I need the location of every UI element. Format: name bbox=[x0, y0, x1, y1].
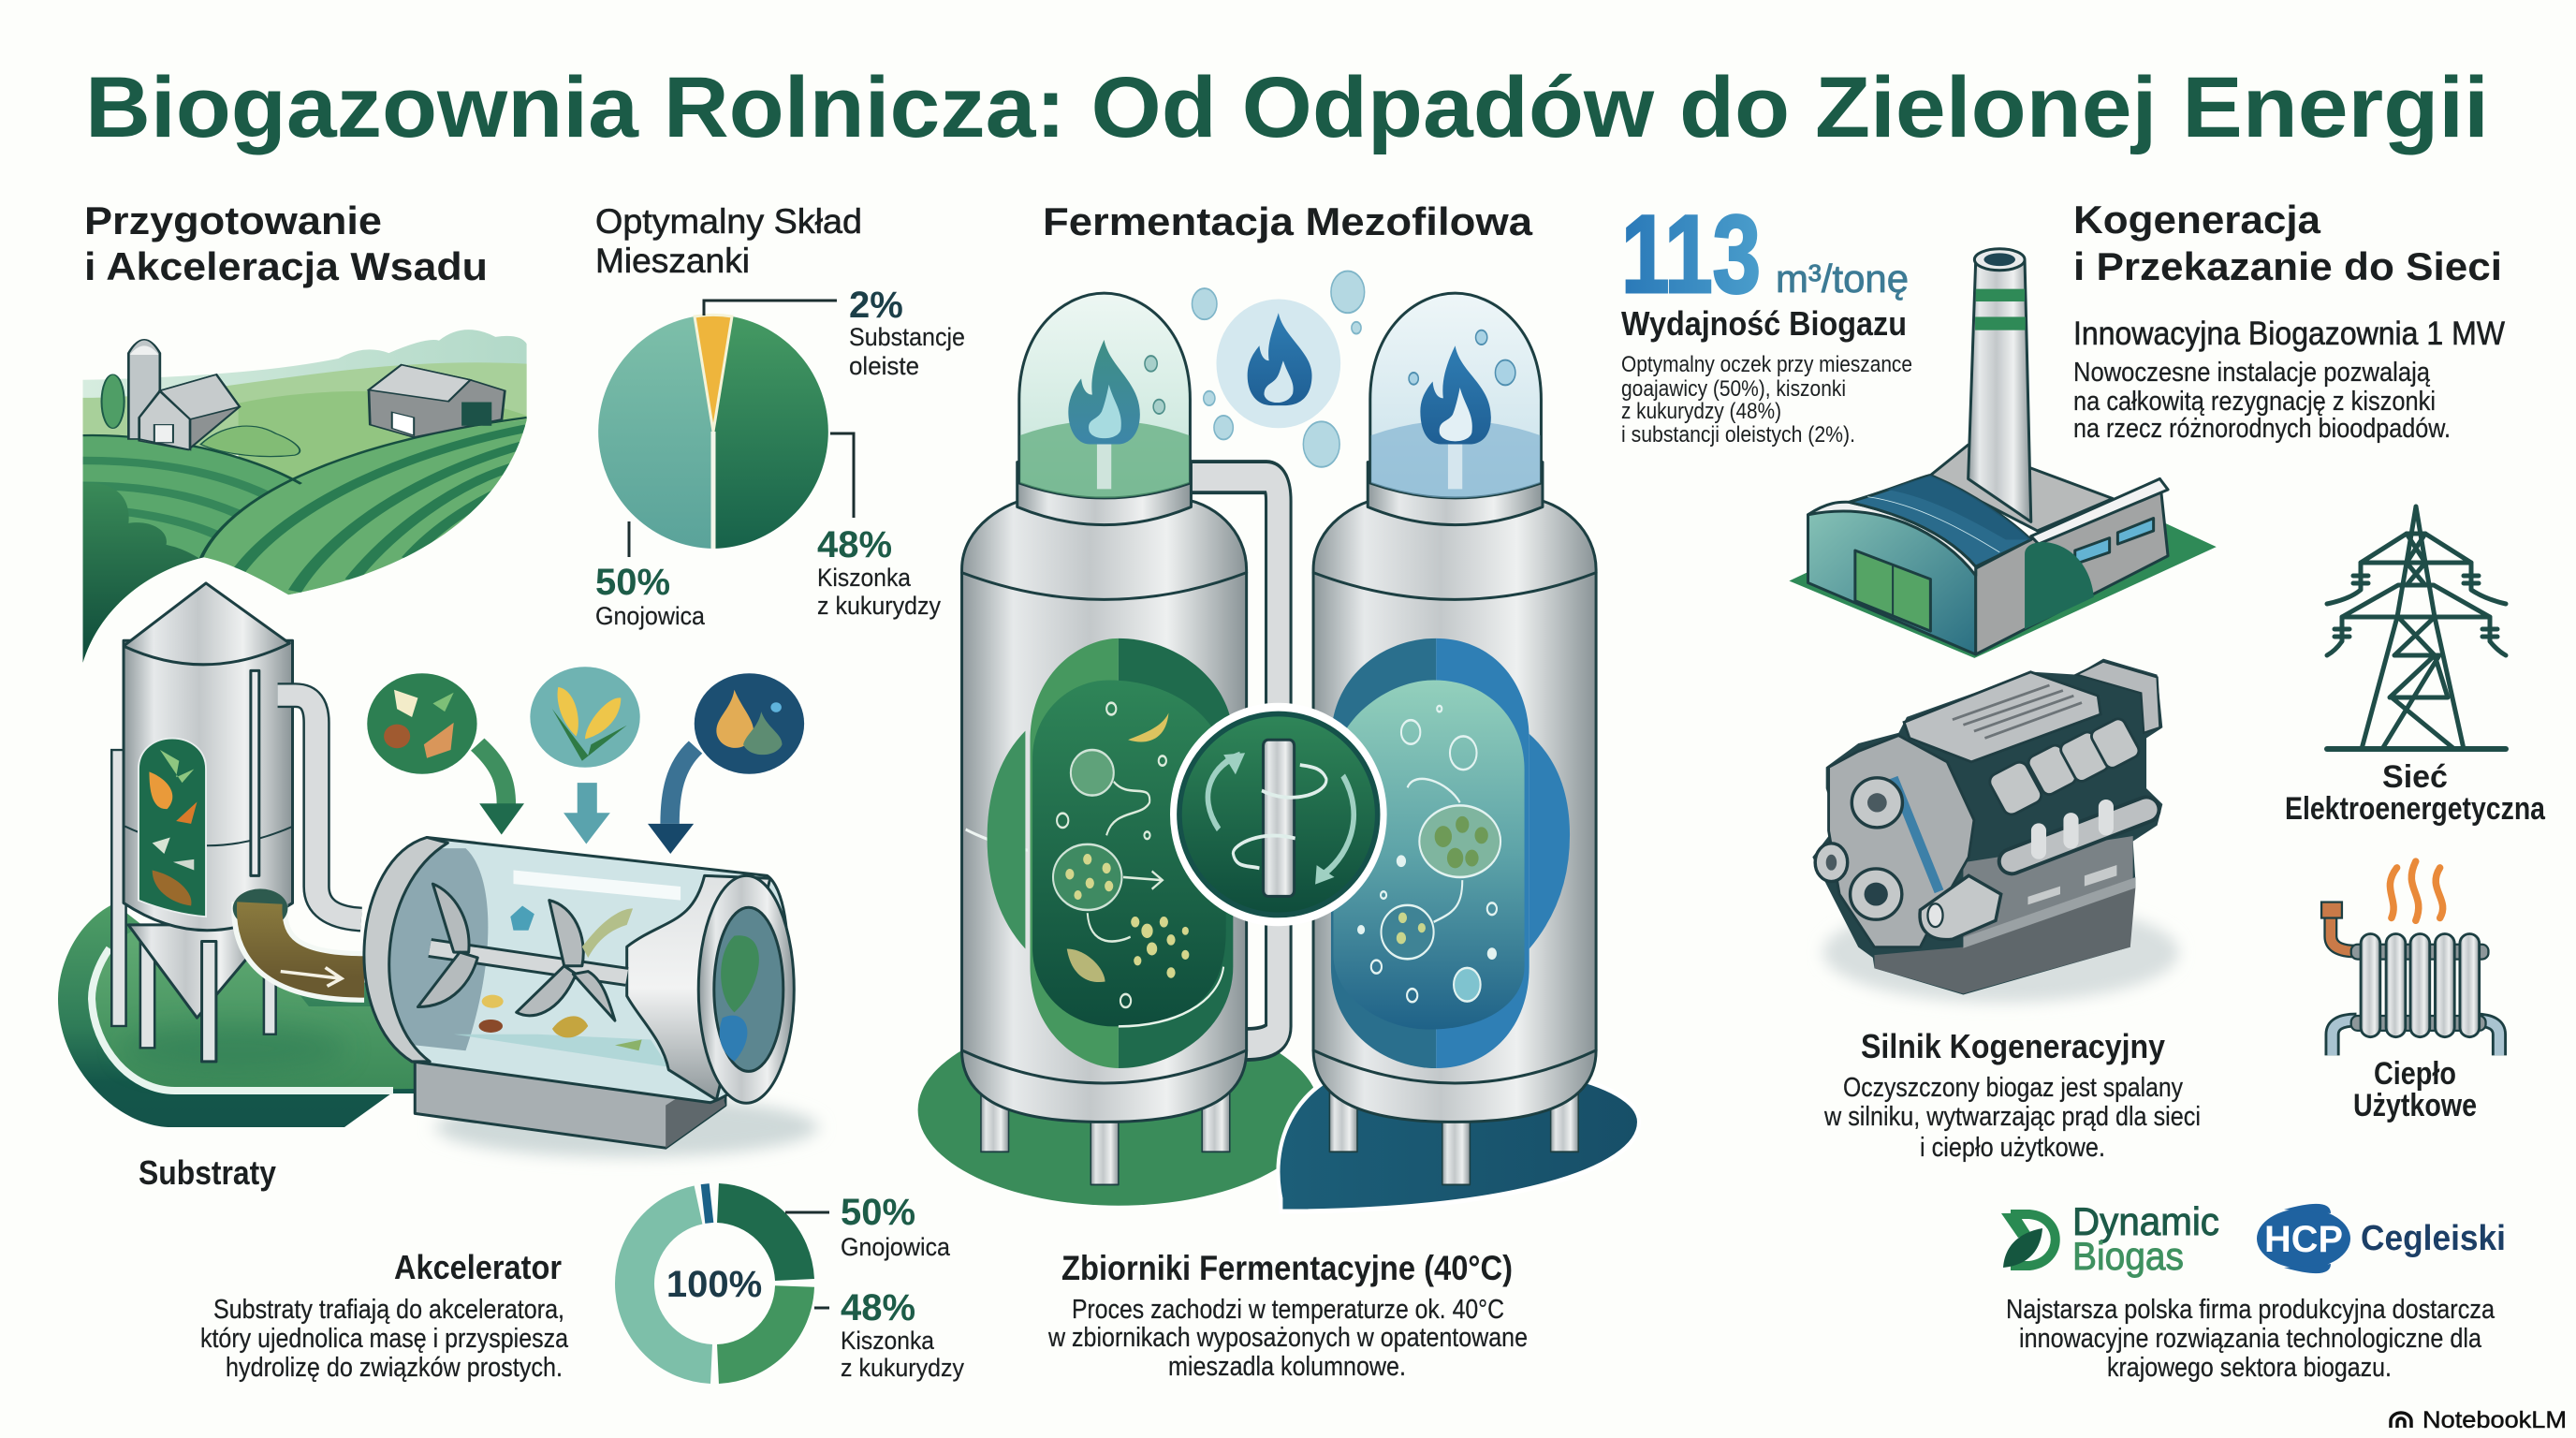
accelerator description: który ujednolica masę i przyspiesza bbox=[200, 1324, 569, 1354]
logo: Dynamic Biogas: Biogas bbox=[2072, 1234, 2184, 1278]
fermentation description: mieszadla kolumnowe. bbox=[1168, 1352, 1406, 1382]
heading: mix composition: Mieszanki bbox=[595, 242, 750, 280]
microbes in green tank bbox=[1053, 703, 1189, 1007]
second barn bbox=[369, 365, 505, 437]
input circle: corn bbox=[530, 667, 640, 768]
input circle: biowaste bbox=[367, 673, 477, 774]
company description bbox=[2006, 1295, 2496, 1383]
accelerator description bbox=[200, 1248, 569, 1383]
connecting pipe bbox=[1190, 477, 1279, 1045]
title: Biogazownia Rolnicza: Od Odpadów do Zielonej Energii bbox=[85, 60, 2489, 155]
accelerator base bbox=[415, 1062, 725, 1148]
pie labels: z kukurydzy bbox=[817, 592, 941, 620]
logo: Dynamic Biogas bbox=[2001, 1199, 2219, 1278]
pie labels: 50% bbox=[595, 562, 670, 603]
innovation text bbox=[2073, 315, 2505, 444]
pie chart bbox=[598, 301, 854, 557]
heading: preparation: i Akceleracja Wsadu bbox=[84, 244, 488, 288]
ground shapes bbox=[918, 1015, 1639, 1211]
engine description: Silnik Kogeneracyjny bbox=[1861, 1027, 2165, 1065]
right tank bbox=[1313, 498, 1596, 1122]
pylon label: Sieć bbox=[2382, 759, 2448, 795]
pie labels bbox=[595, 285, 965, 630]
arrow: biowaste to drum bbox=[477, 744, 524, 835]
mixer badge bbox=[1174, 707, 1383, 922]
radiator label bbox=[2353, 1056, 2477, 1123]
logo: HCP Cegielski: Cegleiski bbox=[2361, 1219, 2506, 1258]
logo: HCP Cegielski bbox=[2257, 1204, 2506, 1273]
innovation text: Nowoczesne instalacje pozwalają bbox=[2073, 358, 2431, 388]
fermentation tanks illustration bbox=[918, 271, 1639, 1211]
heading: cogeneration bbox=[2073, 198, 2502, 288]
company description: innowacyjne rozwiązania technologiczne dla bbox=[2019, 1324, 2482, 1354]
donut labels: 48% bbox=[841, 1287, 915, 1328]
heading: preparation: Przygotowanie bbox=[84, 198, 382, 242]
fermentation description: w zbiornikach wyposażonych w opatentowane bbox=[1047, 1323, 1528, 1353]
engine description bbox=[1823, 1027, 2201, 1163]
pie labels: 2% bbox=[849, 285, 903, 326]
stat: biogas yield: goajawicy (50%), kiszonki bbox=[1621, 376, 1846, 402]
innovation text: na całkowitą rezygnację z kiszonki bbox=[2073, 387, 2436, 417]
microbes in blue tank bbox=[1358, 706, 1500, 1002]
donut labels: Kiszonka bbox=[841, 1327, 935, 1355]
donut chart: 100% bbox=[666, 1264, 762, 1305]
pie labels: Kiszonka bbox=[817, 564, 912, 592]
domes bbox=[1017, 293, 1543, 525]
stat: biogas yield: 113 bbox=[1621, 193, 1761, 316]
green base swoosh under silo bbox=[58, 903, 417, 1127]
heading: mix composition bbox=[595, 202, 862, 280]
logo: HCP Cegielski: HCP bbox=[2264, 1219, 2343, 1260]
donut labels bbox=[841, 1192, 964, 1382]
drum contents bbox=[479, 905, 642, 1050]
donut chart bbox=[635, 1203, 829, 1364]
farm landscape illustration bbox=[82, 330, 527, 663]
fermentation description: Proces zachodzi w temperaturze ok. 40°C bbox=[1072, 1295, 1504, 1325]
pie labels: Substancje bbox=[849, 323, 965, 351]
drum right ring bbox=[698, 875, 794, 1103]
heading: preparation bbox=[84, 198, 488, 288]
donut labels: Gnojowica bbox=[841, 1233, 951, 1261]
flame: left dome bbox=[1068, 340, 1164, 445]
input circle: oil bbox=[695, 673, 804, 774]
heading: mix composition: Optymalny Skład bbox=[595, 202, 862, 241]
stat: biogas yield: m³/tonę bbox=[1776, 257, 1909, 301]
ground shadow bbox=[436, 1097, 818, 1157]
fermentation description bbox=[1047, 1249, 1528, 1382]
connecting pipe bbox=[278, 696, 361, 919]
engine illustration bbox=[1812, 659, 2179, 1003]
heading: cogeneration: i Przekazanie do Sieci bbox=[2073, 244, 2502, 288]
engine description: w silniku, wytwarzając prąd dla sieci bbox=[1823, 1102, 2201, 1132]
company description: Najstarsza polska firma produkcyjna dostarcza bbox=[2006, 1295, 2496, 1325]
pie labels: 48% bbox=[817, 524, 892, 565]
engine description: i ciepło użytkowe. bbox=[1920, 1133, 2105, 1163]
silo body bbox=[124, 583, 293, 1062]
stat: biogas yield bbox=[1621, 193, 1912, 448]
stat: biogas yield: Optymalny oczek przy mieszance bbox=[1621, 352, 1912, 377]
radiator icon bbox=[2321, 861, 2499, 1055]
accelerator description: hydrolizę do związków prostych. bbox=[226, 1353, 563, 1383]
accelerator description: Akcelerator bbox=[394, 1248, 562, 1286]
radiator label: Użytkowe bbox=[2353, 1088, 2477, 1123]
stat: biogas yield: Wydajność Biogazu bbox=[1621, 304, 1907, 343]
heading: fermentation: Fermentacja Mezofilowa bbox=[1043, 199, 1533, 243]
pie labels: Gnojowica bbox=[595, 602, 706, 630]
NotebookLM watermark: NotebookLM bbox=[2422, 1407, 2567, 1433]
donut labels: 50% bbox=[841, 1192, 915, 1233]
accelerator description: Substraty trafiają do akceleratora, bbox=[213, 1295, 564, 1325]
biogas bubble with flame bbox=[1192, 271, 1365, 467]
silo window bbox=[139, 739, 206, 917]
silo legs bbox=[111, 750, 276, 1062]
barn bbox=[139, 374, 240, 449]
stat: biogas yield: z kukurydzy (48%) bbox=[1621, 399, 1781, 424]
flame: right dome bbox=[1409, 330, 1515, 445]
innovation text: na rzecz różnorodnych bioodpadów. bbox=[2073, 414, 2451, 444]
factory building bbox=[1789, 249, 2217, 658]
company description: krajowego sektora biogazu. bbox=[2107, 1353, 2392, 1383]
heading: cogeneration: Kogeneracja bbox=[2073, 198, 2321, 242]
mixer shaft and blades bbox=[417, 884, 633, 1020]
silo on farm bbox=[102, 340, 160, 439]
arrow: oil to drum bbox=[648, 747, 695, 854]
stat: biogas yield: i substancji oleistych (2%). bbox=[1621, 422, 1855, 448]
pylon label bbox=[2285, 759, 2546, 827]
logo: Dynamic Biogas: Dynamic bbox=[2072, 1199, 2219, 1243]
left tank bbox=[962, 498, 1247, 1122]
pie labels: oleiste bbox=[849, 352, 919, 380]
chimney bbox=[1969, 249, 2031, 521]
engine description: Oczyszczony biogaz jest spalany bbox=[1843, 1073, 2183, 1103]
fermentation description: Zbiorniki Fermentacyjne (40°C) bbox=[1061, 1249, 1513, 1287]
radiator label: Ciepło bbox=[2374, 1056, 2456, 1092]
drum left ring bbox=[364, 837, 447, 1062]
arrow: corn to drum bbox=[564, 783, 610, 844]
substrate silo and accelerator illustration bbox=[111, 583, 818, 1157]
label: substrates: Substraty bbox=[139, 1153, 276, 1192]
innovation text: Innowacyjna Biogazownia 1 MW bbox=[2073, 315, 2505, 352]
sludge pipe bbox=[259, 903, 364, 976]
tank legs bbox=[981, 1093, 1578, 1184]
accelerator drum bbox=[375, 837, 787, 1103]
donut labels: z kukurydzy bbox=[841, 1354, 964, 1382]
power pylon bbox=[2327, 506, 2506, 749]
